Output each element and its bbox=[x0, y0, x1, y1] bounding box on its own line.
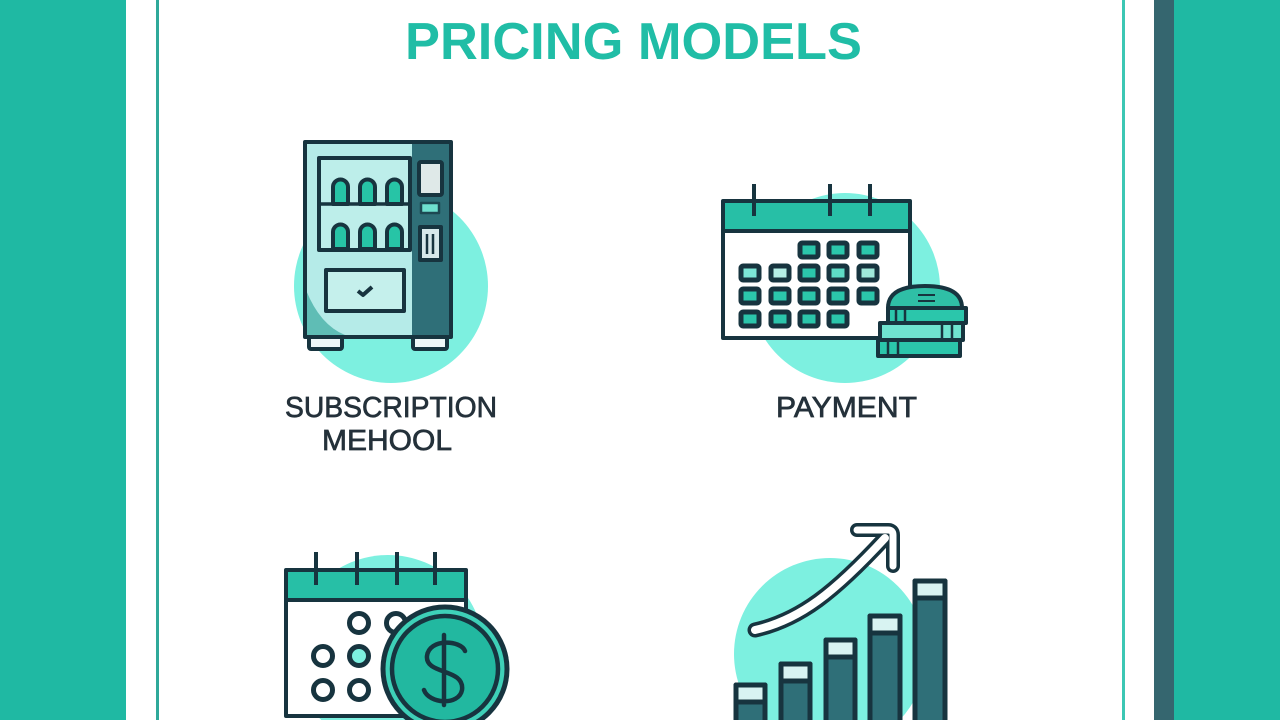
label: payment: PAYMENT bbox=[776, 392, 917, 424]
icon: calendar with dollar coin bbox=[286, 552, 507, 720]
label: subscription method bbox=[285, 392, 497, 457]
dollar sign bbox=[424, 635, 465, 705]
label: subscription method: SUBSCRIPTION bbox=[285, 392, 497, 424]
title: PRICING MODELS bbox=[405, 13, 862, 71]
icon: growth bar chart with arrow bbox=[734, 530, 945, 720]
icon: vending machine bbox=[294, 142, 488, 383]
label: subscription method: MEHOOL bbox=[322, 425, 452, 457]
icon: calendar with coins bbox=[723, 184, 966, 383]
